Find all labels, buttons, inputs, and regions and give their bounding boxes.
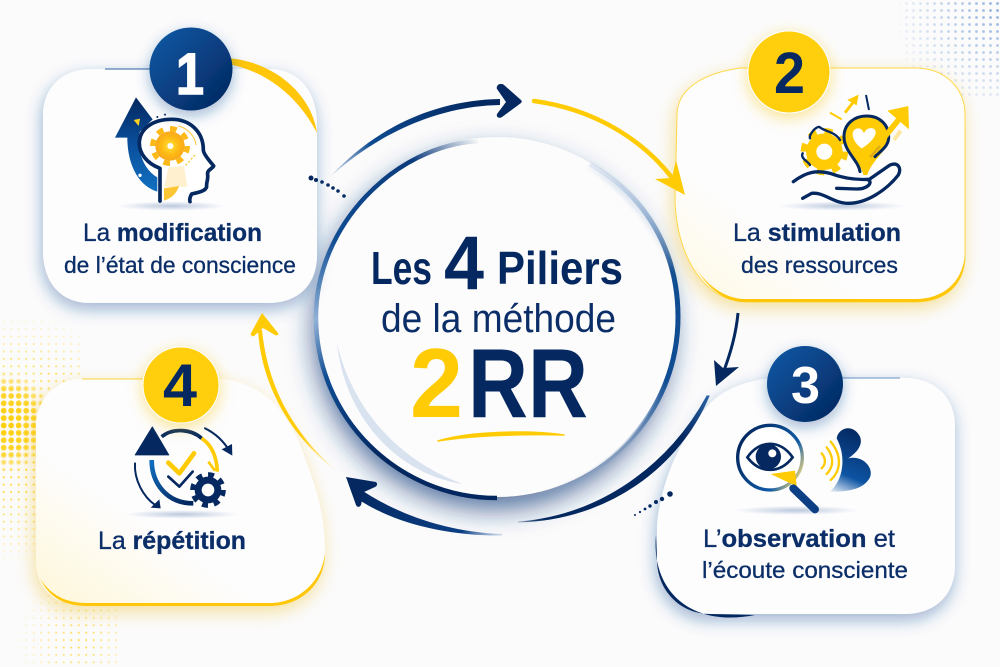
number 1: 1	[176, 42, 204, 107]
icon: magnifier with eye and listening head	[735, 425, 871, 515]
arrow: navy lower right	[518, 396, 709, 522]
icon: hand, gear, light bulb and arrow	[778, 95, 909, 211]
icon: head with gear and rising arrow	[115, 97, 225, 211]
card 2	[675, 68, 965, 302]
card 1 background	[43, 69, 317, 303]
title 2RR	[410, 328, 588, 438]
title line 1: Piliers	[497, 242, 623, 294]
label: La stimulation: La stimulation	[733, 219, 901, 247]
title line 1	[371, 221, 623, 306]
card 2 yellow edge	[692, 255, 965, 302]
arrow: navy top	[331, 84, 522, 176]
number 2: 2	[774, 41, 805, 106]
title line 1: Les	[371, 242, 432, 294]
badge 2	[748, 31, 830, 113]
label: l'écoute consciente: l’écoute consciente	[702, 557, 908, 583]
halftone: left yellow dots	[0, 310, 120, 667]
card 4	[36, 379, 325, 606]
disc	[317, 137, 677, 497]
label: La répétition: La répétition	[98, 527, 246, 555]
ring arc upper left	[316, 141, 478, 317]
label: L'observation et: L’observation et	[703, 525, 895, 553]
ring arc right	[497, 164, 678, 498]
arrow: navy right	[714, 313, 739, 386]
number 4: 4	[163, 352, 198, 419]
label: La modification: La modification	[83, 219, 262, 247]
arrow: yellow left	[251, 313, 338, 472]
yellow underline	[438, 432, 564, 441]
connector: dotted line lower right	[634, 491, 673, 516]
central circle	[316, 137, 678, 498]
card 2 background	[675, 68, 965, 302]
badge 4	[143, 347, 219, 423]
card 3 navy swoosh	[656, 535, 755, 618]
card 4 background	[36, 379, 325, 606]
card 3 background	[657, 378, 955, 614]
title	[371, 221, 623, 441]
inner crescent lower left	[337, 343, 463, 484]
title 2RR: RR	[468, 328, 588, 438]
title line 1: 4	[444, 221, 484, 306]
label: des ressources: des ressources	[741, 252, 898, 278]
badge 3	[767, 346, 843, 422]
card 4 yellow edge	[40, 553, 325, 606]
inner crescent upper right	[585, 165, 667, 262]
label: de l'état de conscience: de l’état de conscience	[64, 252, 296, 278]
icon: repetition cycle with checks and gear	[125, 427, 238, 519]
card 1 top line	[105, 68, 155, 70]
title 2RR: 2	[410, 328, 463, 438]
card 3 top line	[840, 377, 900, 379]
halftone: top right blue dots	[900, 0, 1000, 100]
badge 1	[150, 28, 232, 110]
number 3: 3	[791, 357, 820, 415]
card 3	[656, 378, 955, 618]
arrow: navy bottom left	[346, 477, 502, 536]
card 1 yellow arc	[228, 58, 317, 133]
ring arc lower left	[316, 317, 497, 498]
connector: dotted line upper left	[308, 176, 346, 198]
arrow: yellow top right	[534, 101, 685, 195]
title line 2: de la méthode	[381, 297, 616, 341]
card 4 top line	[82, 378, 150, 380]
card 1	[43, 58, 317, 303]
